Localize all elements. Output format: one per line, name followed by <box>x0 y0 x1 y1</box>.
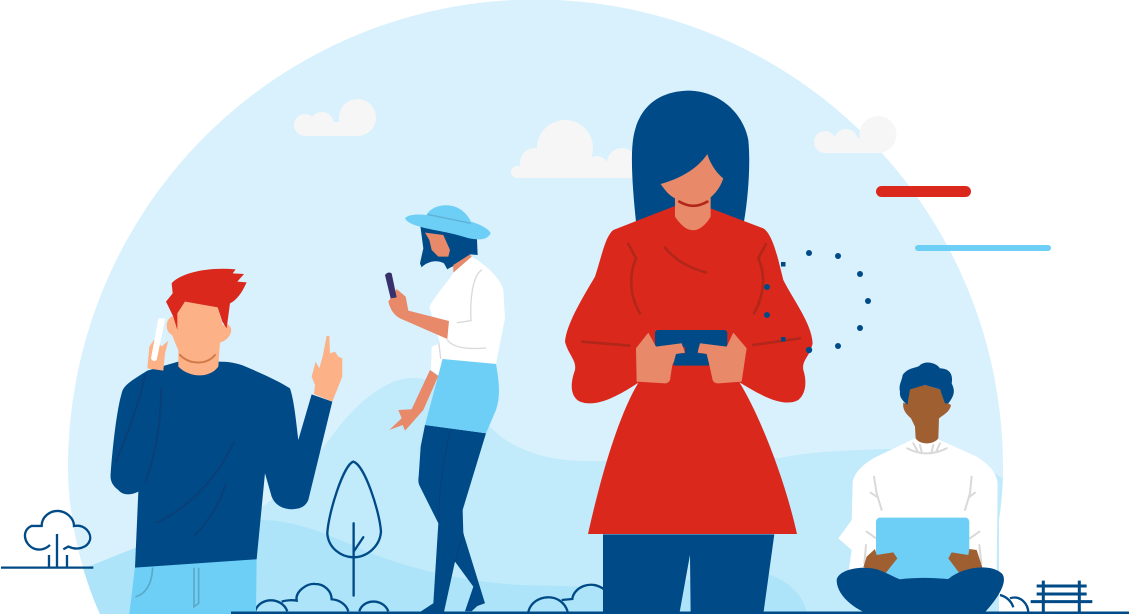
woman shirt <box>429 257 505 376</box>
man sweater folds <box>116 375 234 536</box>
seated man with tablet <box>837 363 1004 614</box>
seated man sweater folds <box>864 443 981 563</box>
back hill <box>60 378 1010 614</box>
cloud left <box>294 99 376 136</box>
blue decorative bar <box>915 245 1051 251</box>
standing woman hands <box>636 333 747 383</box>
standing woman hair <box>632 91 749 222</box>
woman hat band <box>427 214 471 223</box>
seated man sweater <box>838 438 998 573</box>
man on phone <box>111 269 342 614</box>
red decorative bar <box>876 186 971 197</box>
woman hair <box>420 223 478 269</box>
man hand and phone <box>147 318 168 371</box>
standing woman dress top <box>565 206 813 403</box>
cloud right <box>814 116 896 153</box>
standing woman phone <box>655 330 727 366</box>
icon: bushes beside tree <box>255 584 388 611</box>
seated man hair <box>900 363 954 405</box>
man trousers <box>129 558 257 614</box>
seated man hands <box>863 549 982 574</box>
seated man legs <box>837 567 1004 614</box>
loading dots ring <box>764 250 871 353</box>
man trouser folds <box>136 568 199 607</box>
woman in hat <box>385 205 505 612</box>
icon: tall tree <box>327 462 381 596</box>
man hair <box>166 269 247 330</box>
seated man tablet <box>876 518 969 581</box>
woman phone <box>385 272 397 298</box>
woman trousers <box>418 425 486 612</box>
man face <box>167 302 231 375</box>
woman arm with hand <box>388 289 449 339</box>
icon: bench and bush <box>1000 581 1092 613</box>
standing woman trousers <box>603 534 774 614</box>
woman shirt folds <box>439 270 486 358</box>
standing woman face and neck <box>661 154 723 230</box>
woman face <box>425 233 450 257</box>
woman trouser seam <box>439 431 463 562</box>
standing woman dress skirt <box>588 380 797 534</box>
seated man face <box>903 385 951 443</box>
man smile <box>180 355 215 362</box>
man raised hand <box>312 336 342 402</box>
ground line <box>231 612 1129 614</box>
woman skirt <box>425 359 499 433</box>
woman neck <box>453 254 472 273</box>
front hill <box>80 520 807 614</box>
standing woman dress folds and smile <box>582 202 800 346</box>
icon: bush beside standing woman <box>528 585 605 612</box>
standing woman in red <box>565 91 813 614</box>
woman lower arm <box>389 370 438 431</box>
cloud centre <box>511 120 637 178</box>
icon: small tree on the left <box>1 511 93 568</box>
woman hat <box>405 205 491 239</box>
man sweater <box>111 362 332 568</box>
